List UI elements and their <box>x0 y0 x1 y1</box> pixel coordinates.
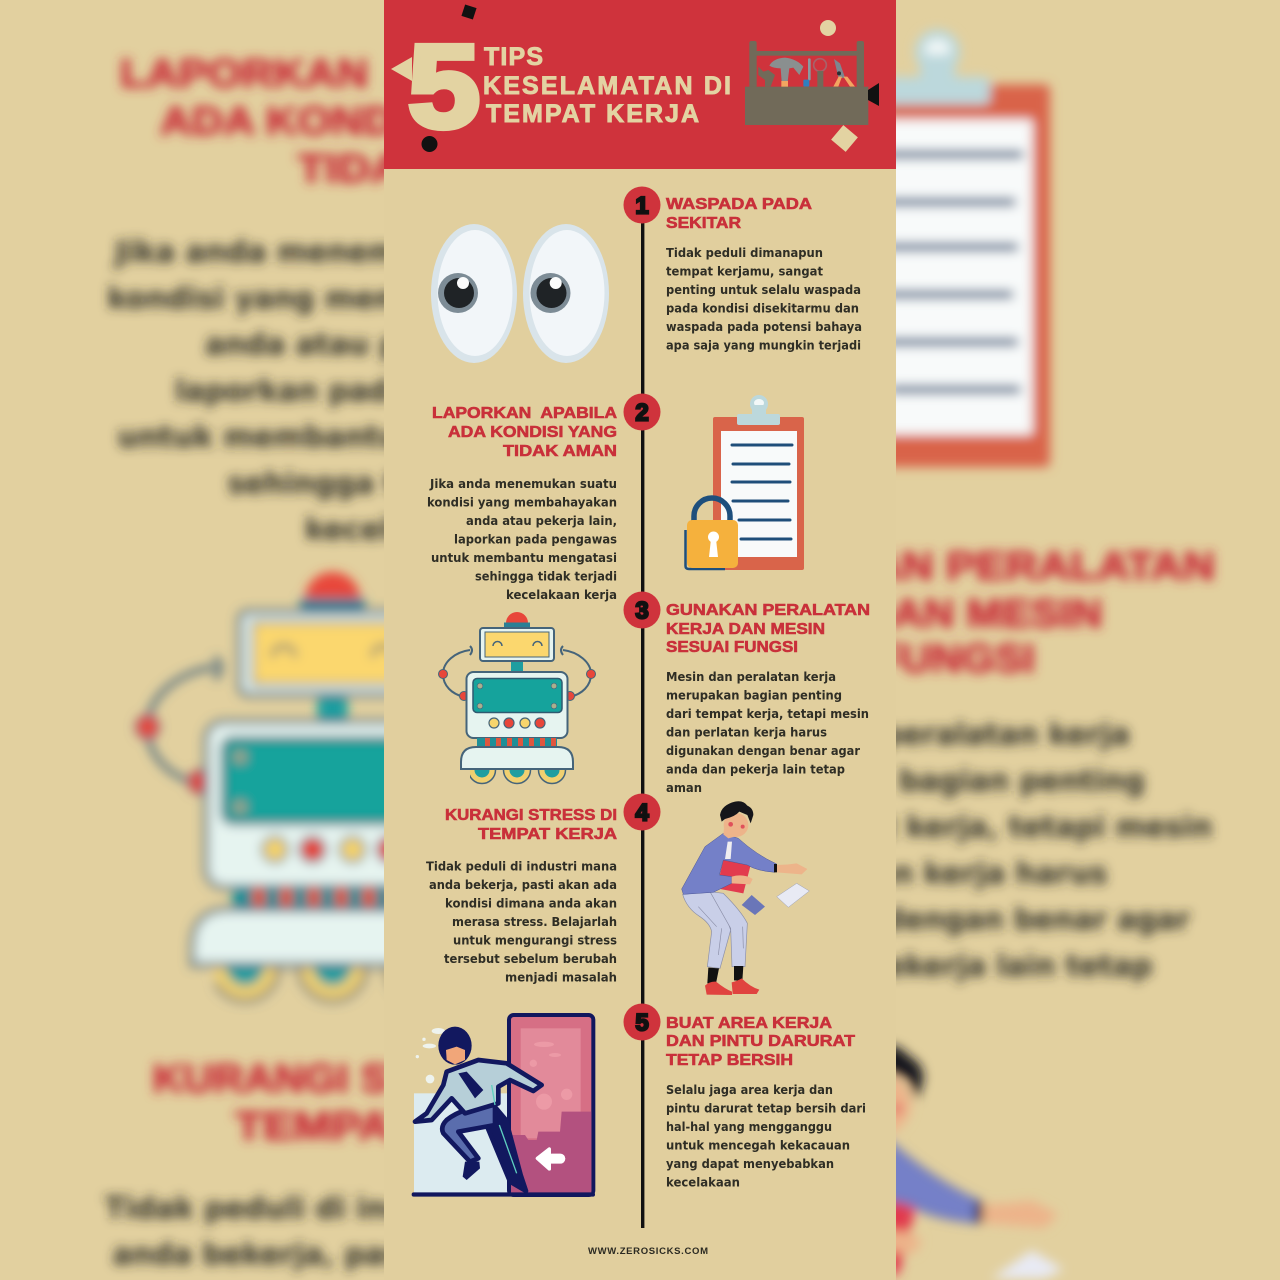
section 2 body text: sehingga tidak terjadi <box>475 570 617 584</box>
big number 5: 5 <box>408 21 480 153</box>
section 3 heading: SESUAI FUNGSI <box>666 639 798 656</box>
section 2 heading: TIDAK AMAN <box>503 443 617 460</box>
decorative black triangle <box>868 83 879 106</box>
section 3 body text <box>666 670 869 795</box>
section 2 body text: kondisi yang membahayakan <box>427 496 617 510</box>
section 5 heading: DAN PINTU DARURAT <box>666 1033 855 1050</box>
section 4 heading: KURANGI STRESS DI <box>445 807 617 824</box>
icon: toolbox <box>745 41 868 125</box>
header banner <box>384 0 896 169</box>
section 2 body text: anda atau pekerja lain, <box>466 514 617 528</box>
section 2 body text: laporkan pada pengawas <box>454 532 617 546</box>
number badge 5 <box>624 1004 660 1040</box>
decorative black circle <box>422 136 438 152</box>
section 4 body text: merasa stress. Belajarlah <box>452 915 617 929</box>
section 3 body text: Mesin dan peralatan kerja <box>666 670 836 684</box>
section 1 heading: SEKITAR <box>666 215 741 232</box>
icon: robot <box>438 612 596 784</box>
poster column <box>384 0 896 1280</box>
decorative black square <box>461 4 477 20</box>
section 4 body text: kondisi dimana anda akan <box>445 896 617 910</box>
section 5 body text: Selalu jaga area kerja dan <box>666 1083 833 1097</box>
section 2 heading: ADA KONDISI YANG <box>448 424 617 441</box>
section 4 body text: untuk mengurangi stress <box>453 934 617 948</box>
number badge 2 <box>624 394 660 430</box>
section 4 heading: TEMPAT KERJA <box>478 826 618 843</box>
number badge 1: 1 <box>635 192 649 220</box>
number badge 5: 5 <box>635 1010 649 1036</box>
number badge 3: 3 <box>635 598 649 624</box>
icon: person running through emergency door <box>412 1015 595 1197</box>
section 5 heading: TETAP BERSIH <box>666 1052 793 1069</box>
title: KESELAMATAN DI <box>483 72 731 100</box>
section 3 heading <box>666 602 870 656</box>
section 4 body text: menjadi masalah <box>505 970 617 984</box>
section 5 body text: kecelakaan <box>666 1176 740 1190</box>
section 5 body text: untuk mencegah kekacauan <box>666 1138 850 1152</box>
section 5 heading: BUAT AREA KERJA <box>666 1015 832 1032</box>
title: TEMPAT KERJA <box>486 100 699 128</box>
section 1 body text <box>666 246 862 352</box>
section 3 body text: dan perlatan kerja harus <box>666 726 827 740</box>
section 1 body text: tempat kerjamu, sangat <box>666 264 823 278</box>
section 3 body text: aman <box>666 781 702 795</box>
decorative cream circle <box>820 20 836 36</box>
section 2 heading <box>432 405 617 460</box>
section 4 heading <box>445 807 618 843</box>
section 1 body text: Tidak peduli dimanapun <box>666 246 823 260</box>
section 1 heading <box>666 196 813 232</box>
section 2 body text: untuk membantu mengatasi <box>431 551 617 565</box>
section 3 heading: GUNAKAN PERALATAN <box>666 602 870 619</box>
section 5 body text: hal-hal yang mengganggu <box>666 1120 832 1134</box>
number badge 3 <box>624 592 660 628</box>
section 4 body text: tersebut sebelum berubah <box>444 952 617 966</box>
section 5 heading <box>666 1015 855 1069</box>
timeline line <box>641 200 644 1228</box>
section 1 heading: WASPADA PADA <box>666 196 813 213</box>
section 3 heading: KERJA DAN MESIN <box>666 621 825 638</box>
section 4 body text: anda bekerja, pasti akan ada <box>429 878 617 892</box>
section 1 body text: apa saja yang mungkin terjadi <box>666 338 861 352</box>
section 5 body text: yang dapat menyebabkan <box>666 1157 834 1171</box>
section 1 body text: waspada pada potensi bahaya <box>666 320 862 334</box>
section 4 body text <box>426 860 617 984</box>
section 3 body text: dari tempat kerja, tetapi mesin <box>666 707 869 721</box>
section 3 body text: merupakan bagian penting <box>666 688 842 702</box>
decorative cream diamond <box>831 125 858 152</box>
icon: eyes <box>431 224 609 363</box>
section 2 body text: kecelakaan kerja <box>506 588 617 602</box>
section 3 body text: anda dan pekerja lain tetap <box>666 762 845 776</box>
section 5 body text: pintu darurat tetap bersih dari <box>666 1102 866 1116</box>
footer website: WWW.ZEROSICKS.COM <box>588 1246 708 1257</box>
section 2 body text <box>427 477 617 602</box>
decorative cream triangle <box>391 57 412 81</box>
section 3 body text: digunakan dengan benar agar <box>666 744 860 758</box>
number badge 1 <box>624 186 660 224</box>
section 2 body text: Jika anda menemukan suatu <box>429 477 617 491</box>
number badge 4 <box>624 794 660 830</box>
section 5 body text <box>666 1083 866 1190</box>
section 1 body text: penting untuk selalu waspada <box>666 283 861 297</box>
title <box>483 43 731 128</box>
section 2 heading: LAPORKAN APABILA <box>432 405 617 422</box>
number badge 2: 2 <box>635 400 649 426</box>
section 4 body text: Tidak peduli di industri mana <box>426 860 617 874</box>
icon: stressed worker dropping papers <box>682 801 809 995</box>
section 1 body text: pada kondisi disekitarmu dan <box>666 302 859 316</box>
number badge 4: 4 <box>635 800 649 826</box>
icon: clipboard with padlock <box>686 395 804 570</box>
title: TIPS <box>484 43 543 71</box>
